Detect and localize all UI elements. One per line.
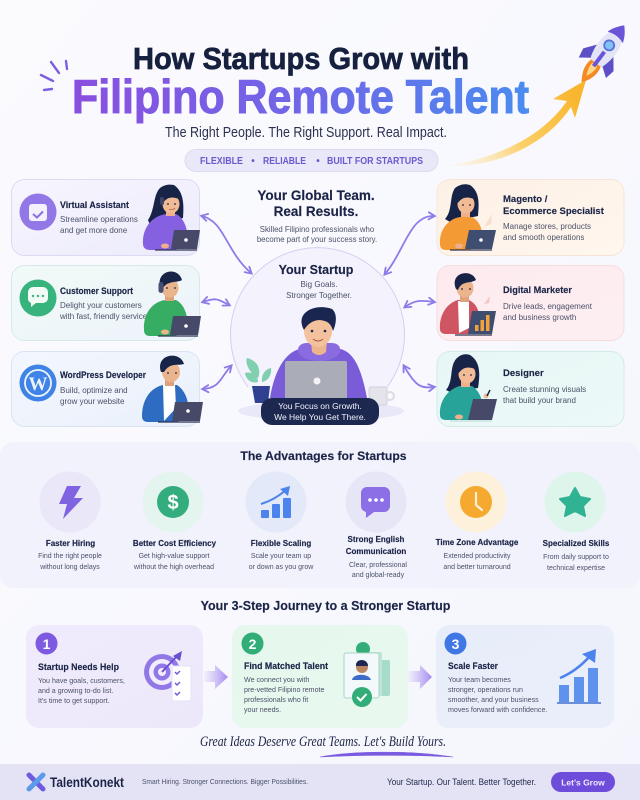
central startup circle: Big Goals. [301, 280, 337, 289]
advantage: Time Zone Advantage: Time Zone Advantage [436, 538, 519, 547]
footer: TalentKonekt [50, 775, 124, 790]
step 1 card: and a growing to-do list. [38, 687, 113, 695]
step 1 card: 1 [43, 636, 51, 652]
icon: candidate cards [344, 642, 390, 707]
advantage: Time Zone Advantage: and better turnaround [443, 564, 511, 571]
step 3 card: moves forward with confidence. [448, 706, 547, 714]
callout pill [261, 398, 379, 425]
advantage: Strong English Communication: Strong English [348, 535, 405, 544]
panel: WordPress Developer [12, 352, 203, 426]
step 2 card: Find Matched Talent [244, 661, 328, 671]
panel: Digital Marketer [437, 266, 624, 340]
connector arrows [202, 216, 434, 389]
illustration: founder with laptop [270, 307, 367, 399]
step 2 card: professionals who fit [244, 696, 308, 704]
step 1 card: You have goals, customers, [38, 677, 125, 685]
panel: advantages: The Advantages for Startups [240, 449, 407, 463]
step 3 card [436, 625, 614, 728]
advantage: Better Cost Efficiency: Get high-value support [139, 553, 209, 560]
advantage: Strong English Communication [346, 472, 407, 579]
step 2 card: pre-vetted Filipino remote [244, 686, 324, 694]
panel: Magento / Ecommerce Specialist: Magento / [503, 194, 548, 205]
panel: Virtual Assistant [12, 180, 200, 256]
advantage: Flexible Scaling: or down as you grow [249, 564, 314, 571]
panel: Designer [437, 352, 624, 426]
handwritten slogan [200, 734, 453, 757]
heading: Your Global Team: Real Results. [274, 204, 358, 219]
subtitle: The Right People. The Right Support. Real Impact. [165, 124, 447, 141]
advantage: Faster Hiring [38, 472, 102, 571]
panel: Designer: Designer [503, 368, 544, 379]
panel: Magento / Ecommerce Specialist: Ecommerce Specialist [503, 206, 605, 217]
panel: Virtual Assistant: Virtual Assistant [60, 200, 130, 211]
central startup circle: Your Startup [279, 263, 354, 277]
heading: Your Global Team [257, 188, 377, 244]
icon: WordPress [20, 364, 56, 402]
icon: chat bubble [20, 280, 56, 316]
advantage: Faster Hiring: Faster Hiring [46, 539, 95, 548]
icon: target and checklist [144, 651, 191, 701]
heading: Your Global Team: Your Global Team. [257, 188, 375, 203]
advantage: Better Cost Efficiency: Better Cost Efficiency [133, 539, 217, 548]
panel: Digital Marketer: Digital Marketer [503, 285, 572, 296]
handwritten slogan: Great Ideas Deserve Great Teams. Let's Build Yours. [200, 734, 446, 750]
tag pill: FLEXIBLE [200, 156, 243, 167]
panel: Customer Support: Delight your customers [60, 301, 142, 310]
heading: Your Global Team: become part of your success story. [257, 235, 377, 244]
illustration: man in blue jacket [142, 356, 203, 422]
tag pill: BUILT FOR STARTUPS [327, 156, 423, 167]
panel: Magento / Ecommerce Specialist: Manage stores, products [503, 222, 591, 231]
panel: advantages [0, 442, 640, 588]
advantage: Flexible Scaling: Scale your team up [251, 553, 311, 560]
arrow: step 2 to 3 [408, 665, 432, 689]
advantage: Strong English Communication: Clear, professional [349, 562, 407, 569]
panel: WordPress Developer: grow your website [60, 397, 125, 406]
callout pill: You Focus on Growth. [278, 401, 362, 411]
tag pill: RELIABLE [263, 156, 306, 167]
panel: Designer: that build your brand [503, 396, 576, 405]
button [551, 772, 615, 792]
advantage: Flexible Scaling: Flexible Scaling [251, 539, 311, 548]
advantage: Time Zone Advantage [436, 472, 519, 571]
panel: Designer: Create stunning visuals [503, 385, 586, 394]
icon: plant [245, 358, 271, 403]
illustration: woman in orange sweater [440, 184, 496, 250]
tag pill [185, 150, 438, 172]
advantage: Better Cost Efficiency [133, 472, 217, 571]
advantage: Specialized Skills: From daily support to [543, 554, 609, 561]
title [72, 41, 529, 123]
illustration: woman with laptop [143, 185, 200, 250]
footer [0, 764, 640, 800]
panel: Customer Support: Customer Support [60, 286, 134, 297]
callout pill: We Help You Get There. [274, 412, 366, 422]
icon: rocket [566, 14, 639, 94]
icon: growth chart [557, 649, 601, 703]
decorative sparks [41, 61, 67, 90]
panel: Digital Marketer: Drive leads, engagement [503, 302, 593, 311]
panel: WordPress Developer: WordPress Developer [60, 370, 146, 381]
advantage: Specialized Skills [543, 472, 610, 572]
heading: Your Global Team: Skilled Filipino professionals who [260, 225, 375, 234]
panel: WordPress Developer: Build, optimize and [60, 386, 128, 395]
arrow: step 1 to 2 [204, 665, 228, 689]
advantage: Time Zone Advantage: Extended productivity [444, 553, 511, 560]
panel: Digital Marketer: and business growth [503, 313, 576, 322]
icon: TalentKonekt logo [29, 775, 43, 789]
tag pill: • [316, 156, 320, 167]
panel: Magento / Ecommerce Specialist: and smooth operations [503, 233, 584, 242]
illustration: woman with tablet [440, 354, 497, 421]
advantage: Better Cost Efficiency: $ [167, 492, 179, 514]
step 2 card: 2 [249, 636, 257, 652]
icon: WordPress: W [28, 374, 48, 395]
footer: Your Startup. Our Talent. Better Together. [387, 777, 536, 787]
step 1 card [26, 625, 203, 728]
panel: Customer Support: with fast, friendly service [59, 312, 148, 321]
step 3 card: Scale Faster [448, 661, 498, 671]
advantage: Strong English Communication: Communication [346, 547, 406, 556]
illustration: man with chart laptop [440, 273, 496, 335]
step 3 card: Your team becomes [448, 676, 511, 684]
illustration: man with headset and laptop [144, 272, 201, 336]
panel: Virtual Assistant: Streamline operations [60, 215, 138, 224]
heading: 3-step journey: Your 3-Step Journey to a Stronger Startup [201, 599, 451, 613]
central startup circle: Stronger Together. [286, 291, 352, 300]
panel: Virtual Assistant: and get more done [60, 226, 128, 235]
step 2 card [232, 625, 408, 728]
advantage: Better Cost Efficiency: without the high overhead [133, 564, 214, 571]
tag pill: • [251, 156, 255, 167]
advantage: Flexible Scaling [246, 472, 314, 571]
advantage: Faster Hiring: Find the right people [38, 553, 102, 560]
step 2 card: We connect you with [244, 676, 309, 684]
step 3 card: 3 [452, 636, 460, 652]
step 1 card: It's time to get support. [38, 697, 110, 705]
advantage: Faster Hiring: without long delays [39, 564, 100, 571]
title: Filipino Remote Talent [72, 70, 529, 123]
step 1 card: Startup Needs Help [38, 662, 119, 672]
icon: mug [369, 387, 394, 405]
growth arrow [444, 80, 586, 166]
central startup circle [231, 248, 405, 425]
advantage: Specialized Skills: Specialized Skills [543, 539, 610, 548]
step 3 card: smoother, and your business [448, 696, 539, 704]
panel: Magento / Ecommerce Specialist [437, 180, 624, 256]
footer: Smart Hiring. Stronger Connections. Bigger Possibilities. [142, 777, 308, 786]
panel: Customer Support [12, 266, 201, 340]
icon: calendar check [20, 194, 56, 230]
button: Let's Grow [561, 778, 605, 788]
step 2 card: your needs. [244, 706, 281, 714]
step 3 card: stronger, operations run [448, 686, 523, 694]
advantage: Specialized Skills: technical expertise [547, 565, 605, 572]
advantage: Strong English Communication: and global-ready [352, 572, 405, 579]
title: How Startups Grow with [133, 41, 469, 76]
